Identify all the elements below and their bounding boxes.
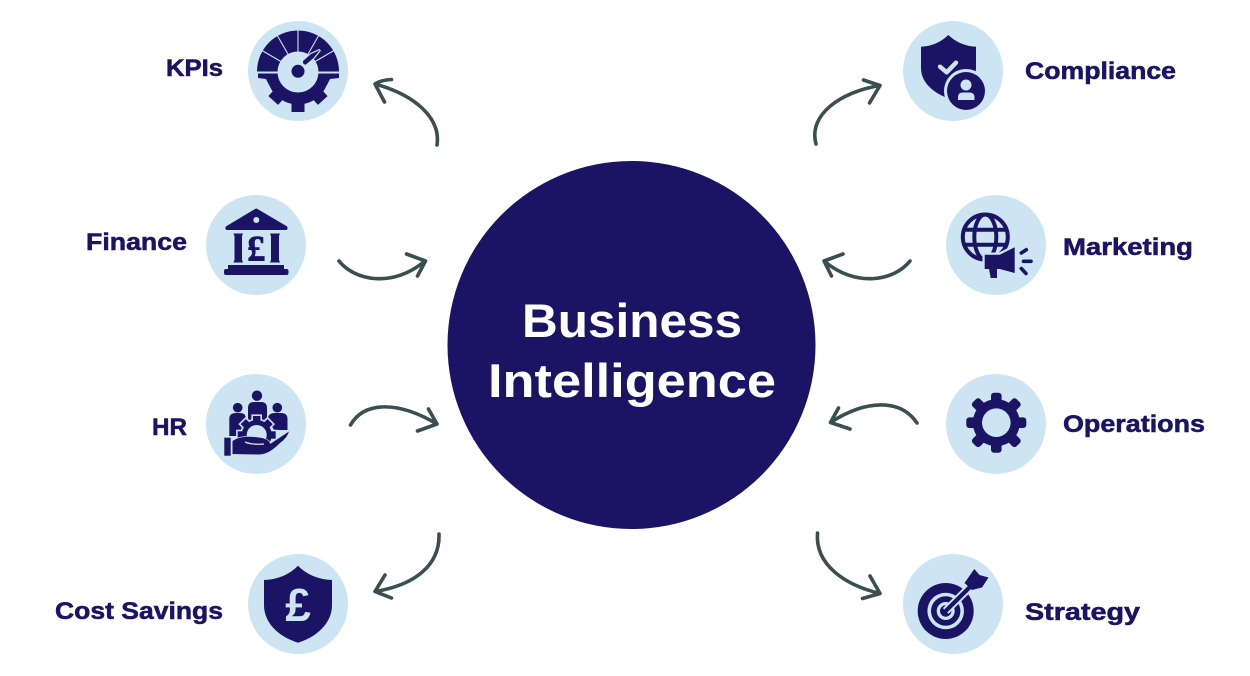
icon: shield with pound sign xyxy=(248,554,348,654)
icon: shield with pound sign: £ xyxy=(285,579,311,631)
item: Marketing xyxy=(946,195,1193,295)
item: Finance xyxy=(86,195,306,295)
arrow: Operations to hub xyxy=(830,405,917,429)
icon: bank with pound sign xyxy=(206,195,306,295)
arrow: hub to Cost Savings xyxy=(375,534,439,598)
item: Operations xyxy=(946,374,1205,474)
arrow: hub to Strategy xyxy=(817,533,880,598)
arrow: HR to hub xyxy=(350,407,437,431)
label: HR: HR xyxy=(152,414,187,441)
central circle: Business Intelligence xyxy=(448,161,816,529)
icon: bank with pound sign: £ xyxy=(247,228,265,268)
arrow: hub to KPIs xyxy=(375,80,437,145)
arrow: Marketing to hub xyxy=(824,254,910,279)
label: Strategy: Strategy xyxy=(1025,599,1141,626)
item: Strategy xyxy=(903,554,1141,654)
arrow: hub to Compliance xyxy=(815,80,880,144)
label: Marketing: Marketing xyxy=(1063,234,1193,261)
icon: shield with check and user badge xyxy=(903,21,1003,121)
label: Operations: Operations xyxy=(1063,411,1205,438)
icon: target with dart xyxy=(903,554,1003,654)
item: Compliance xyxy=(903,21,1176,121)
central circle: Business Intelligence: Business xyxy=(522,294,742,347)
central circle: Business Intelligence: Intelligence xyxy=(488,354,776,407)
icon: gear xyxy=(946,374,1046,474)
label: Finance: Finance xyxy=(86,229,187,256)
item: Cost Savings xyxy=(55,554,348,654)
label: KPIs: KPIs xyxy=(166,55,223,82)
icon: gauge on gear xyxy=(248,21,348,121)
icon: globe and megaphone xyxy=(946,195,1046,295)
item: KPIs xyxy=(166,21,348,121)
icon: people and gear on hand xyxy=(206,374,306,474)
arrow: Finance to hub xyxy=(339,254,426,279)
item: HR xyxy=(152,374,306,474)
label: Cost Savings: Cost Savings xyxy=(55,598,223,625)
label: Compliance: Compliance xyxy=(1025,58,1176,85)
